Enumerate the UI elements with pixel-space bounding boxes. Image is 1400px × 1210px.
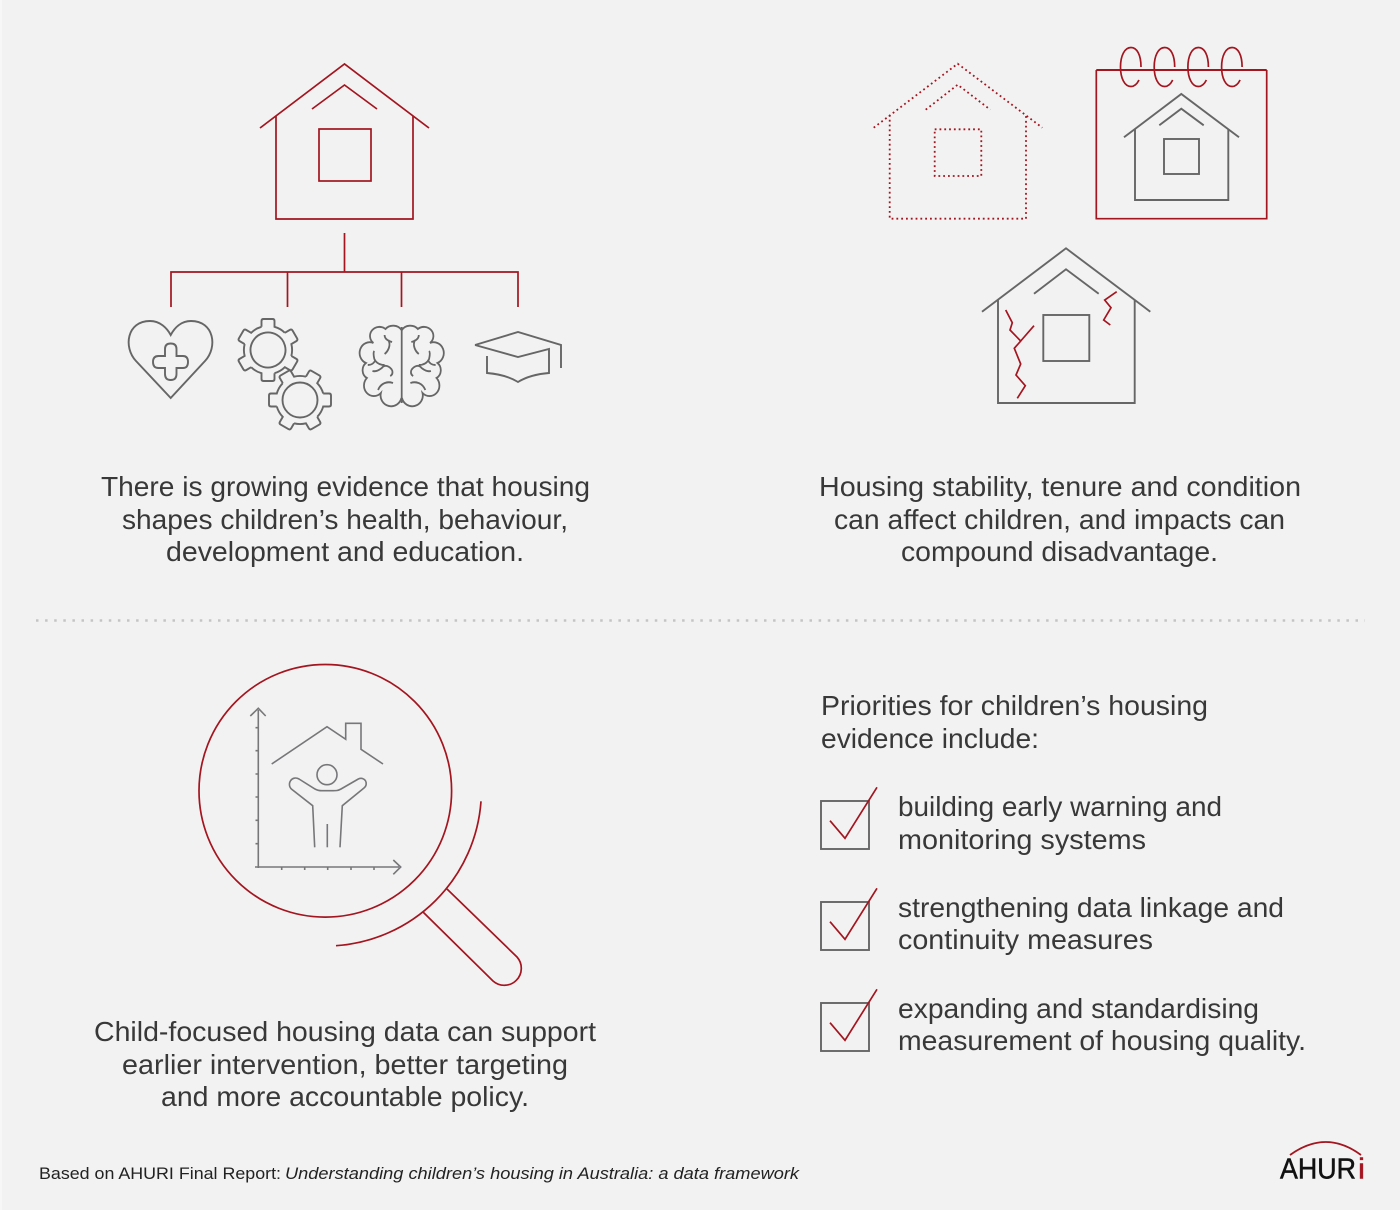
logo: AHURi: i: [1358, 1154, 1365, 1186]
priority 2 text: strengthening data linkage and: [898, 892, 1284, 923]
text: housing stability: can affect children, and impacts can: [834, 504, 1285, 535]
handle: [423, 889, 521, 985]
text: housing stability: Housing stability, tenure and condition: [819, 471, 1301, 502]
icon: magnifying glass over child and house chart: [199, 664, 521, 985]
logo: AHURi: AHUR: [1280, 1154, 1356, 1186]
text: housing evidence: [101, 471, 590, 567]
calendar rings: [1120, 48, 1242, 86]
heading: priorities: [821, 690, 1208, 754]
icon: checkbox: [821, 888, 877, 950]
text: child-focused data: and more accountable policy.: [161, 1081, 529, 1112]
icon: gears: [224, 304, 331, 435]
text: child-focused data: [94, 1016, 596, 1112]
chart axes: [250, 708, 401, 874]
icon: graduation cap: [475, 332, 561, 382]
heading: priorities: Priorities for children’s housing: [821, 690, 1208, 721]
house roof: [272, 723, 383, 764]
cracks: [1006, 292, 1117, 398]
icon: calendar with house: [1096, 48, 1267, 219]
source note: [39, 1164, 801, 1183]
text: housing evidence: development and education.: [166, 536, 524, 567]
text: child-focused data: Child-focused housing data can support: [94, 1016, 596, 1047]
priority 3: [821, 989, 1306, 1056]
icon: cracked house: [982, 248, 1150, 403]
icon: checkbox: [821, 989, 877, 1051]
text: housing stability: [819, 471, 1301, 567]
source note: Based on AHURI Final Report:: [39, 1164, 281, 1183]
source note: Understanding children’s housing in Australia: a data framework: [285, 1164, 801, 1183]
priority 3 text: expanding and standardising: [898, 993, 1259, 1024]
icon: heart with cross: [129, 321, 212, 398]
icon: checkbox: [821, 787, 877, 849]
priority 2 text: continuity measures: [898, 924, 1153, 955]
house in calendar: [1124, 94, 1239, 200]
priority 1 text: monitoring systems: [898, 824, 1146, 855]
child figure: [289, 765, 366, 847]
priority 1: [821, 787, 1222, 855]
priority 2: [821, 888, 1284, 955]
text: housing stability: compound disadvantage.: [901, 536, 1218, 567]
heading: priorities: evidence include:: [821, 723, 1039, 754]
priority 1 text: building early warning and: [898, 791, 1222, 822]
icon: dotted house: [874, 64, 1042, 219]
icon: house with four child outcomes tree: [129, 64, 561, 435]
priority 3 text: [898, 993, 1306, 1056]
text: housing evidence: shapes children’s health, behaviour,: [122, 504, 568, 535]
priority 2 text: [898, 892, 1284, 955]
priority 3 text: measurement of housing quality.: [898, 1025, 1306, 1056]
dotted divider: [36, 619, 1365, 622]
icon: brain: [360, 326, 444, 406]
house outline: [260, 64, 429, 219]
priority 1 text: [898, 791, 1222, 855]
text: child-focused data: earlier intervention, better targeting: [122, 1049, 568, 1080]
text: housing evidence: There is growing evidence that housing: [101, 471, 590, 502]
lens: [199, 664, 452, 917]
branching connector: [171, 233, 518, 307]
